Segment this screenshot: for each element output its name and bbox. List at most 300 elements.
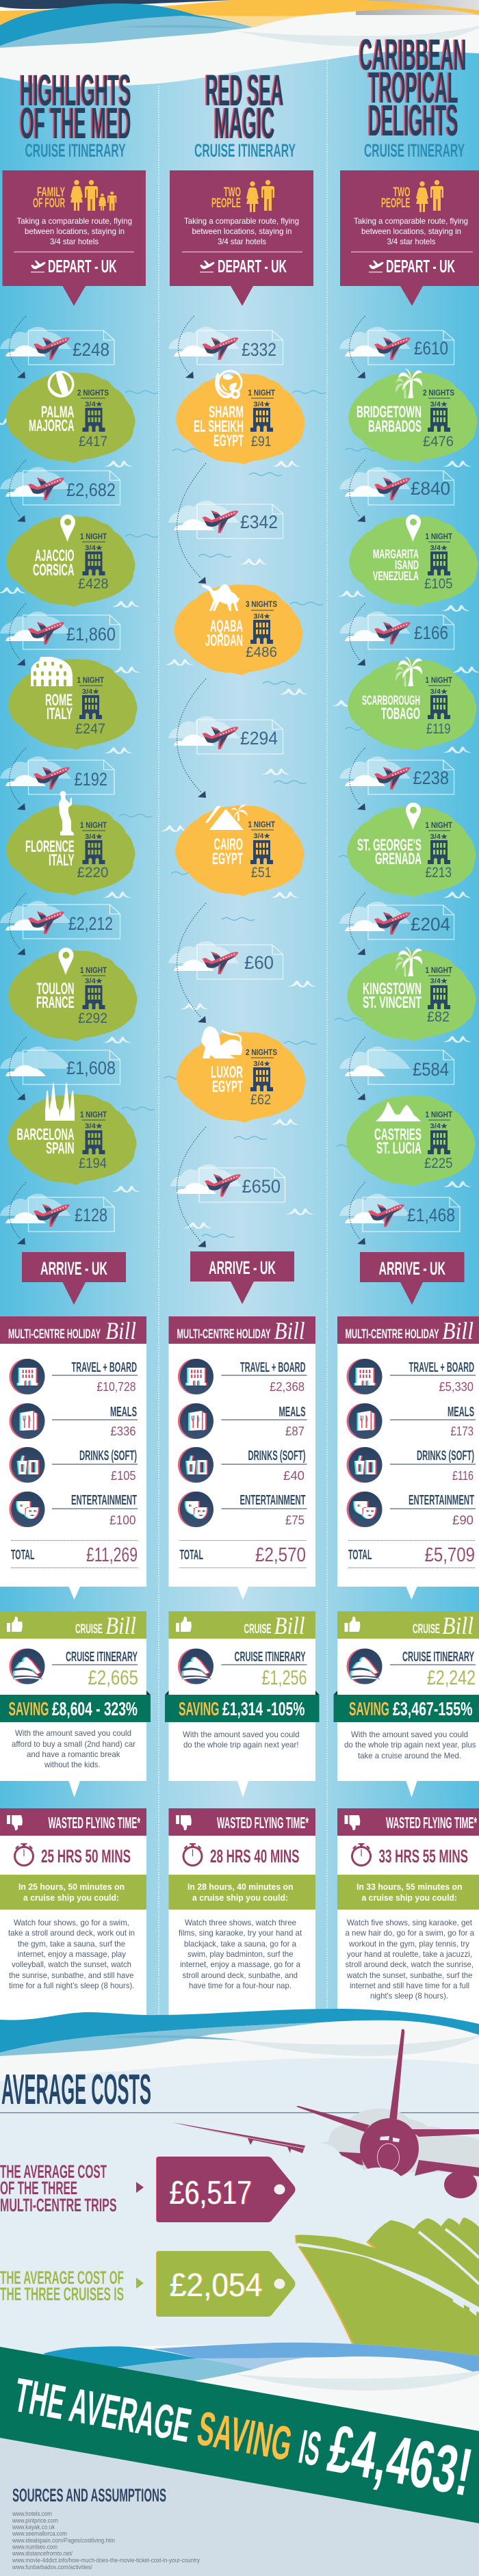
flight: col 2 £332 xyxy=(168,327,283,365)
banner: the average saving is £4,463 xyxy=(0,2347,479,2523)
flight: col 3 £584: £584 xyxy=(413,1059,449,1080)
icon: thumbs down xyxy=(345,1815,360,1830)
island: Luxor Egypt: 2 NIGHTS xyxy=(246,1049,277,1057)
panel: holiday bill col 2: MULTI-CENTRE HOLIDAY xyxy=(177,1327,271,1342)
island: Cairo Egypt: 1 NIGHT xyxy=(248,821,275,829)
banner: the average saving is £4,463: SAVING xyxy=(194,2402,296,2471)
icon: hotel badge xyxy=(178,1359,213,1394)
island: Cairo Egypt: CAIRO xyxy=(213,835,243,854)
icon: hotel xyxy=(82,551,105,575)
panel: wasted flying time col 1: the sunrise, sunbathe, and still have xyxy=(9,1970,134,1980)
panel: cruise bill col 1: Bill xyxy=(105,1612,136,1639)
island: Barcelona Spain: £194 xyxy=(79,1156,107,1171)
panel: holiday bill col 1: TOTAL xyxy=(11,1548,34,1563)
flight: col 3 £238 xyxy=(339,757,454,794)
icon: hotel xyxy=(428,985,450,1009)
panel: depart col 3: 3/4 star hotels xyxy=(387,237,435,246)
text: OF THE MED xyxy=(19,99,130,148)
island: Castries St. Lucia xyxy=(346,1095,475,1186)
panel: wasted flying time col 3 xyxy=(337,1808,479,2024)
panel: depart col 3: PEOPLE xyxy=(381,196,411,211)
island: Florence Italy: £220 xyxy=(77,865,108,881)
panel: wasted flying time col 1: time for a full night's sleep (8 hours). xyxy=(9,1981,134,1990)
icon: snorkel mask xyxy=(216,371,242,399)
flight: col 2 £294: £294 xyxy=(240,728,278,749)
icon: meals badge xyxy=(178,1403,213,1439)
arrive box col 2 xyxy=(190,1251,294,1304)
icon: palm tree xyxy=(396,947,422,976)
island: Rome Italy: ITALY xyxy=(47,705,73,723)
panel: holiday bill col 2: £75 xyxy=(285,1513,305,1527)
island: Ajaccio Corsica: £428 xyxy=(78,576,108,592)
text: average cost of multi-centre trips xyxy=(0,2161,116,2215)
flight: col 1 £128 xyxy=(0,1194,114,1232)
text: HIGHLIGHTS xyxy=(21,66,131,115)
island: Sharm El Sheikh Egypt: EGYPT xyxy=(213,432,244,450)
middle wave banner xyxy=(0,2009,479,2056)
panel: cruise bill col 1: without the kids. xyxy=(44,1760,100,1769)
island: Cairo Egypt: EGYPT xyxy=(212,850,243,868)
text: HIGHLIGHTS xyxy=(19,66,130,115)
panel: wasted flying time col 3: your hand at roulette, take a jacuzzi, xyxy=(347,1949,472,1959)
island: Luxor Egypt: EGYPT xyxy=(212,1078,243,1096)
island: Aqaba Jordan: JORDAN xyxy=(205,632,243,650)
island: Aqaba Jordan: 3/4★ xyxy=(253,613,270,621)
icon: plane taking off xyxy=(369,260,384,272)
island: Sharm El Sheikh Egypt xyxy=(176,371,305,465)
panel: holiday bill col 2: DRINKS (SOFT) xyxy=(248,1448,305,1463)
flight: col 3 £1,468: £1,468 xyxy=(407,1205,455,1225)
panel: depart col 1: FAMILY xyxy=(37,185,65,200)
icon: hotel xyxy=(250,840,273,864)
icon: thumbs up xyxy=(7,1617,23,1632)
top wave banner xyxy=(0,0,479,48)
island: Luxor Egypt: £62 xyxy=(250,1092,271,1108)
island: Scarborough Tobago: SCARBOROUGH xyxy=(362,694,420,708)
panel: depart col 3 xyxy=(340,170,479,306)
flight: col 3 £238: £238 xyxy=(413,768,449,788)
panel: holiday bill col 2: £2,570 xyxy=(255,1544,306,1566)
text: source list: www.distancefromto.net/ xyxy=(12,2550,73,2557)
price tag: £6,517: £6,517 xyxy=(170,2175,252,2211)
icon: hotel xyxy=(82,1130,105,1154)
flight: col 1 £1,608 xyxy=(0,1047,120,1084)
flight: col 1 £2,682: £2,682 xyxy=(66,480,116,500)
bottom wave banner xyxy=(0,2343,479,2463)
island: St George's Grenada xyxy=(347,803,476,897)
island: Ajaccio Corsica: CORSICA xyxy=(33,561,74,580)
flight: col 1 £2,212 xyxy=(0,901,120,939)
icon: entertainment badge xyxy=(178,1492,213,1527)
icon: hotel xyxy=(82,408,105,432)
price tag: £2,054: £2,054 xyxy=(169,2267,262,2304)
panel: holiday bill col 3: TOTAL xyxy=(348,1548,372,1563)
island: Kingstown St. Vincent: 3/4★ xyxy=(430,978,448,985)
island: Scarborough Tobago: TOBAGO xyxy=(381,705,420,723)
icon: thumbs down xyxy=(176,1815,192,1830)
island: Luxor Egypt xyxy=(177,1026,305,1123)
text: average cost of cruises: THE THREE CRUISES IS xyxy=(0,2284,124,2304)
panel: holiday bill col 2: £2,368 xyxy=(270,1380,305,1394)
icon: hotel badge xyxy=(10,1359,45,1394)
icon: hotel xyxy=(428,840,450,864)
flight: col 3 £610 xyxy=(339,327,454,365)
subtitle: cruise itinerary col 1: CRUISE ITINERARY xyxy=(25,140,126,161)
icon: hotel xyxy=(82,985,105,1009)
island: Rome Italy: 1 NIGHT xyxy=(77,677,104,685)
text: average cost of cruises xyxy=(0,2267,124,2304)
panel: holiday bill col 1: MULTI-CENTRE HOLIDAY xyxy=(8,1327,101,1342)
saving ribbon xyxy=(334,1691,479,1722)
island: Kingstown St. Vincent xyxy=(347,947,476,1041)
panel: depart col 2: Taking a comparable route, flying xyxy=(184,216,299,226)
icon: beach ball xyxy=(48,371,74,398)
arrow: green xyxy=(136,2278,144,2289)
island: Margarita Island Venezuela: MARGARITA xyxy=(373,547,419,561)
price tag: £2,054: £2,054 xyxy=(170,2267,262,2304)
saving ribbon: SAVING xyxy=(179,1698,219,1719)
footer background xyxy=(0,2432,479,2576)
panel: holiday bill col 2: Bill xyxy=(274,1317,305,1344)
panel: depart col 2 xyxy=(170,170,313,306)
icon: camel xyxy=(202,584,240,611)
panel: wasted flying time col 2: have time for a four-hour nap. xyxy=(189,1981,292,1990)
icon: thumbs down xyxy=(7,1815,23,1830)
island: St George's Grenada: ST. GEORGE'S xyxy=(357,836,422,855)
island: Kingstown St. Vincent: £82 xyxy=(427,1009,450,1025)
panel: cruise bill col 2: £1,256 xyxy=(261,1667,307,1689)
icon: thumbs up xyxy=(176,1617,192,1632)
panel: holiday bill col 1: £10,728 xyxy=(97,1380,135,1394)
island: Toulon France: TOULON xyxy=(37,980,74,998)
icon: stopwatch xyxy=(183,1843,202,1865)
panel: cruise bill col 1: afford to buy a small (2nd hand) car xyxy=(12,1739,135,1749)
column dividers xyxy=(159,60,327,2015)
panel: holiday bill col 1: £336 xyxy=(111,1424,135,1438)
icon: ship badge xyxy=(10,1649,45,1684)
panel: wasted flying time col 2: WASTED FLYING TIME* xyxy=(217,1814,309,1832)
icon: plane taking off xyxy=(31,260,46,272)
icon: thumbs up xyxy=(345,1617,360,1632)
island: Castries St. Lucia: £225 xyxy=(424,1156,453,1171)
panel: holiday bill col 2: MEALS xyxy=(279,1405,305,1420)
title: Highlights of the Med xyxy=(19,66,131,148)
icon: hotel xyxy=(250,620,273,644)
flight: col 3 £840 xyxy=(339,467,454,505)
island: Kingstown St. Vincent: ST. VINCENT xyxy=(363,993,422,1012)
panel: wasted flying time col 2 xyxy=(168,1808,315,2024)
island: Florence Italy: ITALY xyxy=(49,851,74,870)
island: Barcelona Spain: 1 NIGHT xyxy=(80,1111,107,1119)
panel: cruise bill col 1: and have a romantic break xyxy=(27,1749,120,1759)
icon: entertainment badge xyxy=(10,1492,45,1527)
panel: depart col 2: DEPART - UK xyxy=(218,256,287,276)
panel: holiday bill col 3: £116 xyxy=(452,1469,474,1483)
panel: wasted flying time col 1: Watch four shows, go for a swim, xyxy=(14,1918,129,1927)
icon: hotel badge xyxy=(346,1359,382,1394)
flight: col 1 £1,860: £1,860 xyxy=(66,624,116,645)
icon: drinks badge xyxy=(346,1447,382,1483)
panel: cruise bill col 2: Bill xyxy=(274,1612,305,1639)
panel: wasted flying time col 2: swim, play badminton, surf the xyxy=(187,1949,294,1959)
panel: holiday bill col 1 xyxy=(0,1316,146,1600)
icon: hotel xyxy=(428,551,450,575)
panel: wasted flying time col 1: the gym, take a sauna, surf the xyxy=(18,1939,125,1949)
island: Barcelona Spain: BARCELONA xyxy=(16,1126,74,1144)
island: Scarborough Tobago: 3/4★ xyxy=(430,688,448,696)
banner: the average saving is £4,463: THE AVERAGE xyxy=(10,2368,195,2452)
island: Cairo Egypt: 3/4★ xyxy=(253,833,270,840)
panel: wasted flying time col 2: Watch three shows, watch three xyxy=(185,1918,296,1927)
island: Palma Majorca: PALMA xyxy=(41,403,74,421)
panel: cruise bill col 1 xyxy=(0,1611,151,1797)
island: Sharm El Sheikh Egypt: 1 NIGHT xyxy=(248,389,275,398)
text: RED SEA xyxy=(204,66,282,115)
flight: col 1 £192 xyxy=(0,757,114,794)
island: Luxor Egypt: LUXOR xyxy=(211,1063,243,1082)
text: source list: www.pintprice.com xyxy=(12,2517,58,2524)
panel: holiday bill col 3: £5,330 xyxy=(439,1380,474,1394)
section background: average costs xyxy=(0,2009,479,2357)
text: source list xyxy=(12,2510,200,2571)
icon: stopwatch xyxy=(15,1843,33,1865)
panel: holiday bill col 1: MEALS xyxy=(110,1405,137,1420)
panel: cruise bill col 1: CRUISE xyxy=(75,1622,103,1637)
saving ribbon xyxy=(165,1691,319,1722)
island: Rome Italy xyxy=(8,657,137,750)
island: Palma Majorca: MAJORCA xyxy=(29,417,74,435)
panel: holiday bill col 1: TRAVEL + BOARD xyxy=(71,1360,137,1375)
island: Bridgetown Barbados: BARBADOS xyxy=(368,417,422,436)
icon: map pin xyxy=(406,515,421,542)
flight: col 3 £840: £840 xyxy=(411,478,450,499)
price tag: £2,054: £2,054 xyxy=(170,2267,263,2304)
icon: drinks badge xyxy=(178,1447,213,1483)
panel: holiday bill col 3: £90 xyxy=(452,1513,474,1527)
island: Sharm El Sheikh Egypt: 3/4★ xyxy=(253,401,270,408)
flight: col 3 £1,468 xyxy=(339,1194,460,1232)
icon: map pin xyxy=(59,948,74,975)
panel: wasted flying time col 1: 25 HRS 50 MINS xyxy=(41,1846,131,1866)
price tag: £6,517: £6,517 xyxy=(170,2175,253,2211)
island: St George's Grenada: 3/4★ xyxy=(430,833,448,841)
island: Sharm El Sheikh Egypt: EL SHEIKH xyxy=(194,417,244,436)
panel: wasted flying time col 1 xyxy=(0,1808,146,2024)
panel: depart col 1 xyxy=(3,170,146,306)
panel: depart col 2: between locations, staying in xyxy=(192,226,292,236)
text: source list: www.movie-4ddict.info/how-much-does-the-movie-ticket-cost-in-your-country xyxy=(12,2557,200,2564)
icon: hotel xyxy=(428,695,450,719)
island: Aqaba Jordan: AQABA xyxy=(210,617,243,636)
panel: cruise bill col 3: take a cruise around the Med. xyxy=(358,1751,461,1760)
island: Palma Majorca: 2 NIGHTS xyxy=(77,389,109,398)
panel: holiday bill col 1: £11,269 xyxy=(86,1544,138,1566)
panel: depart col 1: between locations, staying in xyxy=(25,226,125,236)
flight: col 2 £60 xyxy=(168,941,283,979)
island: Ajaccio Corsica: 3/4★ xyxy=(85,545,103,552)
island: Florence Italy: FLORENCE xyxy=(25,837,74,856)
island: Scarborough Tobago: 1 NIGHT xyxy=(426,677,452,685)
island: Ajaccio Corsica xyxy=(6,515,135,607)
panel: holiday bill col 3 xyxy=(337,1316,479,1600)
panel: cruise bill col 2: do the whole trip again next year! xyxy=(183,1740,298,1749)
saving ribbon: £8,604 - 323% xyxy=(52,1698,138,1719)
panel: holiday bill col 2: TRAVEL + BOARD xyxy=(240,1360,305,1375)
title: Red Sea Magic xyxy=(204,66,283,148)
island: Toulon France xyxy=(8,948,137,1041)
island: Bridgetown Barbados: BRIDGETOWN xyxy=(357,403,422,421)
panel: depart col 3: Taking a comparable route, flying xyxy=(354,216,468,226)
panel: wasted flying time col 3: watch the sunset, sunbathe, surf the xyxy=(346,1970,473,1980)
panel: holiday bill col 1: ENTERTAINMENT xyxy=(71,1493,137,1508)
island: Aqaba Jordan: 3 NIGHTS xyxy=(246,601,277,609)
island: Barcelona Spain: 3/4★ xyxy=(85,1123,103,1130)
panel: depart col 2: TWO xyxy=(224,185,241,200)
icon: David statue xyxy=(59,791,74,835)
island: Margarita Island Venezuela: 1 NIGHT xyxy=(426,533,452,541)
island: Palma Majorca: £417 xyxy=(79,434,107,450)
island: Aqaba Jordan: £486 xyxy=(246,645,277,660)
arrive box col 2: ARRIVE - UK xyxy=(209,1258,276,1278)
icon: hotel xyxy=(428,408,450,432)
arrive box col 1: ARRIVE - UK xyxy=(40,1258,107,1279)
panel: depart col 2: PEOPLE xyxy=(211,196,241,211)
island: Margarita Island Venezuela: ISAND xyxy=(395,558,419,572)
island: Sharm El Sheikh Egypt: £91 xyxy=(251,434,271,450)
island: Bridgetown Barbados xyxy=(348,369,478,463)
icon: hotel xyxy=(79,695,102,719)
flight: col 1 £128: £128 xyxy=(75,1205,107,1225)
panel: holiday bill col 2: £87 xyxy=(285,1424,305,1438)
panel: wasted flying time col 2: In 28 hours, 40 minutes on xyxy=(187,1882,294,1892)
island: Palma Majorca xyxy=(6,371,135,463)
flight: col 2 £650 xyxy=(170,1165,285,1202)
panel: holiday bill col 3: £173 xyxy=(450,1424,474,1438)
panel: cruise bill col 3: CRUISE xyxy=(413,1622,440,1637)
island: Toulon France: £292 xyxy=(78,1011,107,1026)
flight: col 3 £204 xyxy=(339,902,454,939)
panel: holiday bill col 2: TOTAL xyxy=(179,1548,203,1563)
island: Margarita Island Venezuela xyxy=(349,515,478,607)
icon: palm tree xyxy=(396,369,422,398)
panel: wasted flying time col 3: internet and still have time for a full xyxy=(350,1981,469,1990)
icon: ship badge xyxy=(178,1649,213,1684)
panel: holiday bill col 2 xyxy=(168,1316,315,1600)
icon: hotel xyxy=(250,1067,273,1091)
saving ribbon: SAVING xyxy=(8,1698,49,1719)
price tag: £2,054 xyxy=(156,2251,296,2317)
island: Kingstown St. Vincent: 1 NIGHT xyxy=(426,967,452,975)
panel: holiday bill col 1: £105 xyxy=(111,1469,135,1483)
panel: wasted flying time col 3: In 33 hours, 55 minutes on xyxy=(357,1882,463,1892)
subtitle: cruise itinerary col 2: CRUISE ITINERARY xyxy=(194,140,296,161)
icon: Pitons mountains xyxy=(376,1102,421,1121)
island: St George's Grenada: 1 NIGHT xyxy=(426,822,452,830)
island: Bridgetown Barbados: 3/4★ xyxy=(430,401,448,408)
panel: wasted flying time col 3: workout in the gym, play tennis, try xyxy=(348,1939,469,1949)
small sea waves xyxy=(0,391,479,1237)
panel: cruise bill col 1: £2,665 xyxy=(88,1667,138,1689)
flight: col 3 £166: £166 xyxy=(414,623,448,643)
icon: palm tree xyxy=(396,657,422,686)
icon: colosseum xyxy=(31,657,73,686)
island: Aqaba Jordan xyxy=(174,584,302,675)
panel: cruise bill col 2: With the amount saved you could xyxy=(183,1730,300,1739)
icon: sphinx xyxy=(201,1026,242,1058)
icon: map pin xyxy=(406,803,421,830)
icon: plane taking off xyxy=(200,260,215,272)
banner: the average saving is £4,463: IS xyxy=(296,2420,325,2476)
route arrows col 3 xyxy=(350,316,365,1245)
panel: wasted flying time col 2: a cruise ship you could: xyxy=(192,1892,288,1903)
island: Cairo Egypt xyxy=(175,805,304,896)
flight: col 1 £1,608: £1,608 xyxy=(66,1058,116,1078)
flight: col 1 £192: £192 xyxy=(74,769,107,790)
island: Toulon France: FRANCE xyxy=(36,993,74,1012)
island: Barcelona Spain: SPAIN xyxy=(46,1139,74,1158)
text: source list: www.numbeo.com xyxy=(12,2544,57,2551)
icon: pyramids xyxy=(205,805,248,830)
icon: drinks badge xyxy=(10,1447,45,1483)
flight: col 3 £204: £204 xyxy=(411,914,450,935)
panel: holiday bill col 2: ENTERTAINMENT xyxy=(240,1493,305,1508)
icon: map pin xyxy=(60,515,75,542)
panel: wasted flying time col 2: films, sing karaoke, try your hand at xyxy=(179,1928,302,1938)
text: source list: www.funbarbados.com/activities/ xyxy=(12,2564,92,2571)
heading: sources and assumptions: SOURCES AND ASSUMPTIONS xyxy=(12,2485,166,2506)
arrive box col 3 xyxy=(360,1252,464,1305)
panel: wasted flying time col 1: a cruise ship you could: xyxy=(23,1892,119,1903)
title: Caribbean Tropical Delights xyxy=(359,30,467,145)
panel: wasted flying time col 3: stroll around deck, watch the sunrise, xyxy=(345,1960,474,1969)
flight: col 1 £248: £248 xyxy=(73,339,109,360)
panel: wasted flying time col 3: Watch five shows, sing karaoke, get xyxy=(347,1918,473,1927)
island: Castries St. Lucia: 3/4★ xyxy=(430,1123,448,1130)
panel: wasted flying time col 1: WASTED FLYING TIME* xyxy=(48,1814,140,1832)
island: Rome Italy: 3/4★ xyxy=(82,688,99,696)
flight: col 2 £60: £60 xyxy=(244,952,274,973)
island: Margarita Island Venezuela: VENEZUELA xyxy=(373,569,419,583)
island: Ajaccio Corsica: 1 NIGHT xyxy=(80,533,107,541)
panel: wasted flying time col 2: stroll around deck, sunbathe, and xyxy=(182,1970,298,1980)
island: Margarita Island Venezuela: 3/4★ xyxy=(430,545,448,552)
panel: depart col 3: TWO xyxy=(393,185,411,200)
icon: stopwatch xyxy=(352,1843,371,1865)
island: Florence Italy: 1 NIGHT xyxy=(80,822,107,830)
text: AVERAGE COSTS xyxy=(1,2066,151,2113)
flight: col 2 £342: £342 xyxy=(240,512,278,532)
text: average cost of multi-centre trips: THE AVERAGE COST xyxy=(0,2161,107,2182)
text: average cost of multi-centre trips: OF THE THREE xyxy=(0,2178,77,2198)
panel: cruise bill col 3: do the whole trip again next year, plus xyxy=(344,1740,476,1749)
icon: meals badge xyxy=(10,1403,45,1439)
text: MAGIC xyxy=(215,99,275,148)
saving ribbon: SAVING xyxy=(349,1698,389,1719)
panel: depart col 1: DEPART - UK xyxy=(48,256,117,276)
panel: wasted flying time col 1: internet, enjoy a massage, play xyxy=(18,1949,126,1959)
panel: wasted flying time col 3: a new hair do, go for a swim, go for a xyxy=(345,1928,474,1938)
panel: depart col 1: OF FOUR xyxy=(33,196,65,211)
panel: cruise bill col 3 xyxy=(334,1611,479,1797)
icon: hotel xyxy=(428,1130,450,1154)
panel: holiday bill col 3: Bill xyxy=(442,1317,474,1344)
flight: col 3 £584 xyxy=(339,1047,454,1084)
island: Toulon France: 1 NIGHT xyxy=(80,967,107,975)
text: average cost of multi-centre trips: MULTI-CENTRE TRIPS xyxy=(0,2195,116,2215)
island: Luxor Egypt: 3/4★ xyxy=(253,1061,270,1068)
price tag: £6,517 xyxy=(156,2157,296,2222)
island: St George's Grenada: GRENADA xyxy=(375,850,422,868)
